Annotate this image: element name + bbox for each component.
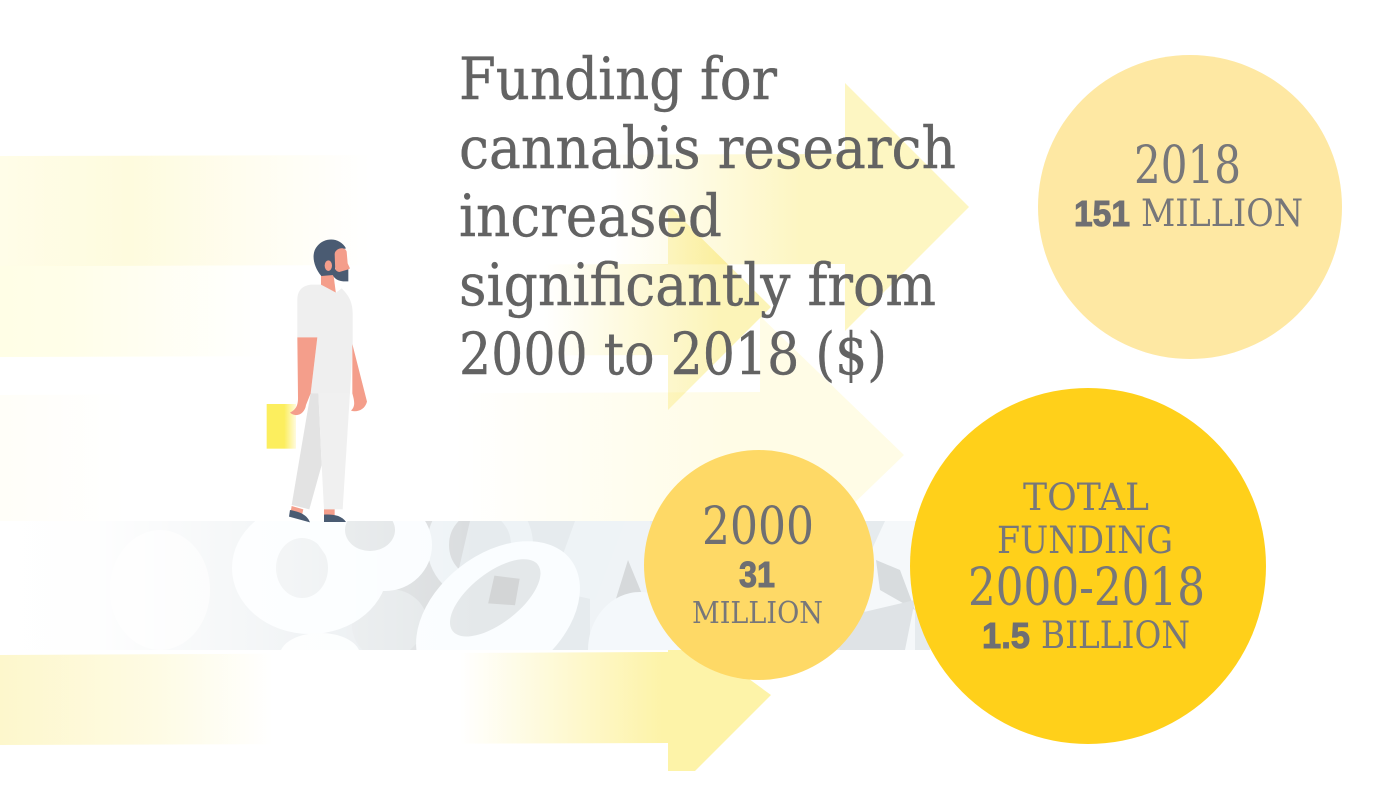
big number nine [241, 521, 432, 650]
circle: total funding: BILLION [1041, 614, 1190, 657]
circle: 2018: MILLION [1141, 192, 1303, 235]
circle: 2000: 2000 [702, 497, 814, 557]
numbers strip [211, 521, 930, 650]
arrow: bottom arrow [0, 620, 771, 771]
feet [291, 506, 303, 515]
circle: total funding: TOTAL [1023, 476, 1149, 519]
arm front [351, 344, 367, 411]
beard [332, 262, 348, 281]
neck [321, 273, 336, 294]
circle: total funding: 1.5 [982, 615, 1030, 656]
title: increased [459, 182, 722, 250]
title: Funding for [459, 45, 777, 113]
title: 2000 to 2018 ($) [459, 320, 887, 388]
circle: 2000: 31 [739, 554, 775, 595]
arrow: third arrow, pale [0, 316, 904, 594]
title [459, 45, 956, 388]
circle: total funding [910, 388, 1266, 744]
circle: 2018 [1038, 55, 1342, 359]
shoes [289, 510, 346, 522]
book [267, 404, 296, 449]
face [335, 248, 350, 273]
circle: total funding: 2000-2018 [968, 558, 1205, 618]
rear trouser leg [292, 393, 322, 509]
circle: 2000: MILLION [692, 596, 823, 631]
arrow: top arrow [0, 83, 969, 331]
circle: total funding: FUNDING [997, 519, 1173, 562]
circle: 2018: 151 [1074, 193, 1130, 234]
title: significantly from [459, 251, 936, 319]
circle: 2000 [644, 450, 874, 680]
arm back [290, 337, 317, 415]
shirt [297, 285, 353, 393]
illustration: man walking with book [267, 239, 367, 522]
circle: 2018: 2018 [1134, 136, 1241, 196]
ear [325, 260, 332, 271]
arrow: second arrow [0, 205, 771, 410]
big number zero [416, 542, 580, 650]
front trouser leg [318, 393, 350, 509]
head [314, 239, 346, 276]
title: cannabis research [459, 114, 956, 182]
